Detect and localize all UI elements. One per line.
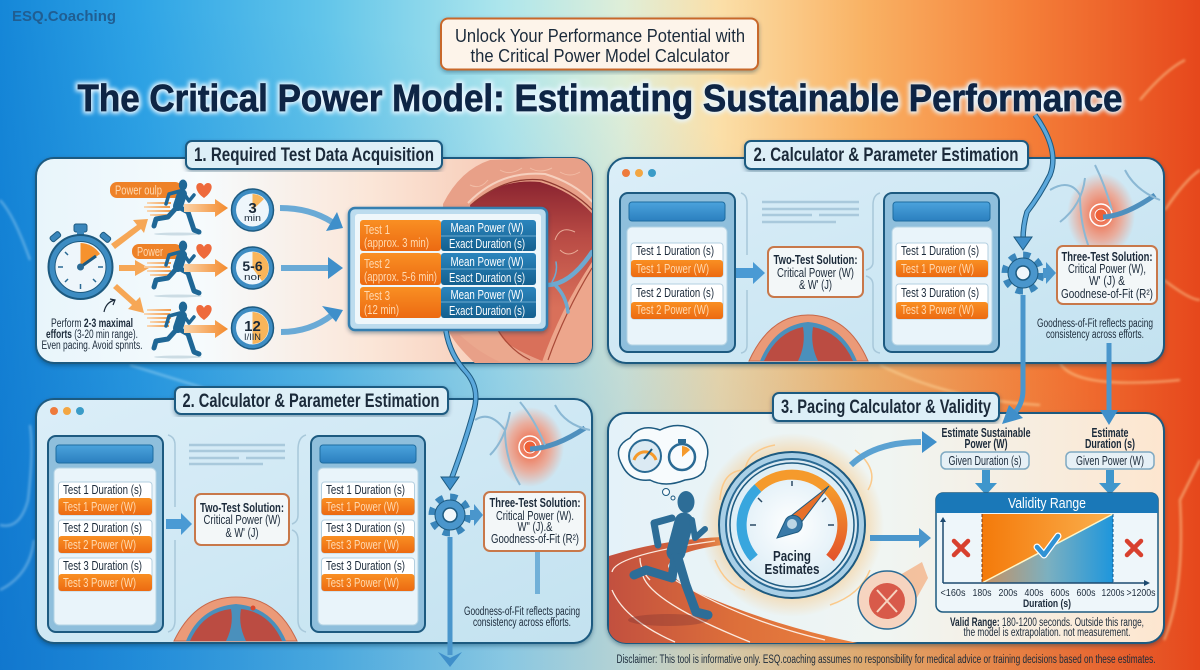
given power box [1066, 452, 1154, 469]
three-test solution box: Critical Power (W). [496, 509, 574, 523]
note text: Perform 2-3 maximal [51, 318, 133, 330]
invalid mark right [1127, 541, 1141, 555]
organ illustration [174, 597, 297, 641]
left input card [620, 193, 735, 352]
test 1 row: Test 1 [364, 223, 390, 237]
row: test 1 [58, 482, 152, 515]
note text: efforts (3-20 min range). [46, 329, 138, 341]
power output pill: Power oulp [115, 184, 162, 198]
estimate duration label [1085, 426, 1135, 451]
row: test 1: Test 1 Duration (s) [63, 483, 142, 497]
goodness-of-fit note: consistency across efforts. [1046, 329, 1144, 341]
axis labels: 600s [1050, 587, 1070, 599]
test 1 row: Mean Power (W) [450, 220, 524, 235]
heading: section 3 [773, 393, 999, 421]
row: test 3: Test 3 Duration (s) [63, 559, 142, 573]
estimate power label [942, 426, 1031, 451]
valid range note: the model is extrapolation. not measurement. [964, 627, 1130, 639]
subtitle box [441, 18, 758, 70]
heading: section 2 upper [745, 141, 1028, 169]
hearts [196, 183, 212, 320]
two-test solution box: Two-Test Solution: [774, 253, 858, 267]
two-test solution box: Critical Power (W) [777, 266, 854, 280]
axis labels: 400s [1024, 587, 1044, 599]
row: test 3 again [322, 558, 414, 591]
heading: section 1: 1. Required Test Data Acquisition [194, 145, 434, 166]
estimate power label: Estimate Sustainable [942, 426, 1031, 440]
big gauge: Pacing [773, 549, 811, 565]
clock: 12 min [232, 307, 274, 349]
icon: gear [1006, 256, 1040, 290]
orange arrows to clocks [184, 199, 228, 338]
row: test 3: Test 3 Duration (s) [901, 286, 979, 300]
clock: 3 min [232, 189, 274, 231]
thought bubble [618, 425, 708, 500]
row: test 2 [58, 520, 152, 553]
flow arrow: three-test to estimate duration [1100, 343, 1118, 425]
two-test solution box: & W' (J) [226, 526, 258, 540]
row: test 1 [896, 243, 988, 277]
axis labels: <160s [940, 587, 966, 599]
row: test 2 [631, 284, 723, 319]
runner shadows [154, 232, 202, 358]
validity range chart [936, 493, 1158, 612]
test 2 row: (approx. 5-6 min) [364, 270, 437, 284]
small arrow to stopwatch [104, 299, 115, 312]
test 2 row: Esact Duration (s) [449, 270, 525, 285]
test 2 row [360, 253, 536, 285]
arrows down to validity [975, 470, 1121, 495]
clock: 5-6 min: nor [244, 272, 261, 282]
flow arrow: title to upper gear [1014, 115, 1053, 250]
curved arrow to estimate [851, 431, 937, 465]
row: test 1: Test 1 Power (W) [326, 500, 399, 514]
three-test solution box: Three-Test Solution: [490, 496, 580, 510]
three-test solution box: W" (J).& [518, 520, 553, 534]
three-test solution box [484, 492, 585, 551]
three-test solution box: W' (J) & [1089, 274, 1126, 288]
estimate duration label: Estimate [1092, 426, 1129, 440]
estimate power label: Power (W) [964, 437, 1008, 451]
goodness-of-fit note: Goodness-of-Fit reflects pacing [1037, 318, 1153, 330]
row: test 2: Test 2 Power (W) [636, 303, 709, 317]
connector line [535, 552, 540, 594]
axis labels: >1200s [1126, 587, 1156, 599]
window dots [50, 407, 84, 415]
two-test solution box [195, 494, 289, 545]
validity range chart: Validity Range [1008, 496, 1086, 512]
heading: section 3: 3. Pacing Calculator & Validity [781, 397, 991, 418]
clock: 12 min: I/IIN [244, 332, 261, 342]
left input card [48, 436, 163, 632]
two-test solution box: & W' (J) [799, 278, 832, 292]
row: test 1: Test 1 Power (W) [63, 500, 136, 514]
heading: section 1 [186, 141, 442, 169]
icon: gear [433, 498, 467, 532]
gauge glow [700, 433, 884, 617]
test 3 row: (12 min) [364, 303, 399, 317]
valid range note [950, 617, 1144, 639]
right input card [884, 193, 999, 352]
arrow to three-test solution [1043, 262, 1056, 284]
row: test 3 [896, 284, 988, 319]
speed lines [144, 202, 171, 327]
row: test 2: Test 2 Duration (s) [63, 521, 142, 535]
subtitle box: Unlock Your Performance Potential with [455, 26, 745, 46]
goodness-of-fit note: consistency across efforts. [473, 617, 571, 629]
row: test 3 [322, 520, 414, 553]
row: test 1: Test 1 Duration (s) [901, 244, 979, 258]
title: The Critical Power Model: Estimating Sustainable Performance [78, 78, 1122, 120]
test 3 row: Mean Power (W) [450, 287, 524, 302]
three-test solution box: Three-Test Solution: [1062, 250, 1152, 264]
clock: 3 min: min [244, 213, 261, 224]
row: test 1 [322, 482, 414, 515]
clock: 5-6 min [232, 247, 274, 289]
test 2 row: Mean Power (W) [450, 254, 524, 269]
row: test 3 again: Test 3 Power (W) [326, 576, 399, 590]
validity range chart: Duration (s) [1023, 598, 1071, 610]
flow arrow: table to lower gear [441, 331, 476, 490]
icon: stopwatch [48, 224, 112, 299]
panel: required test data [36, 141, 600, 366]
test 2 row: Test 2 [364, 257, 390, 271]
axis labels: 180s [972, 587, 992, 599]
row: test 1 [631, 243, 723, 277]
right input card [311, 436, 425, 632]
panel: calculator lower left [36, 387, 592, 643]
three-test solution box: Goodness-of-Fit (R²) [491, 532, 579, 546]
big gauge [719, 452, 865, 598]
axis labels [940, 587, 1156, 599]
test 1 row: Exact Duration (s) [449, 236, 525, 251]
axis labels: 600s [1076, 587, 1096, 599]
row: test 2: Test 2 Power (W) [63, 538, 136, 552]
clock: 12 min: 12 [244, 318, 261, 335]
brackets [741, 193, 880, 353]
runner 1 [154, 180, 199, 232]
given power box: Given Power (W) [1076, 454, 1144, 468]
organ top right [475, 402, 590, 487]
arrow to two-test solution [736, 262, 765, 284]
big gauge: Estimates [764, 562, 820, 578]
two-test solution box: Two-Test Solution: [200, 501, 284, 515]
running track [609, 537, 862, 644]
axis labels: 200s [998, 587, 1018, 599]
window dots [622, 169, 656, 177]
title: The Critical Power Model: Estimating Sustainable Performance [78, 78, 1122, 120]
runner figure [634, 491, 708, 615]
panel: pacing calculator [608, 393, 1164, 644]
note text: Even pacing. Avoid spnnts. [42, 340, 142, 352]
three-test solution box: Goodnese-of-Fit (R²) [1061, 287, 1153, 301]
goodness-of-fit note: Goodness-of-Fit reflects pacing [464, 606, 580, 618]
arrow to two-test solution [166, 513, 192, 535]
flow arrow: upper gear to estimate power [1002, 295, 1026, 424]
row: test 3 again: Test 3 Duration (s) [326, 559, 405, 573]
heading: section 2 upper: 2. Calculator & Parameter Estimation [754, 145, 1018, 166]
test 1 row: (approx. 3 min) [364, 236, 429, 250]
goodness-of-fit note [1037, 318, 1153, 341]
placeholder lines [189, 445, 285, 464]
heading: section 2 lower: 2. Calculator & Parameter Estimation [182, 391, 440, 412]
clock: 3 min: 3 [248, 200, 257, 217]
brackets [168, 435, 306, 632]
three-test solution box [1057, 246, 1157, 304]
note text [42, 318, 142, 352]
small organ icon [858, 562, 928, 629]
runner 2 [154, 240, 199, 293]
two-test solution box: Critical Power (W) [204, 513, 280, 527]
table: test data [349, 208, 547, 330]
organ illustration [443, 156, 600, 366]
given duration box [941, 452, 1029, 469]
test 3 row [360, 287, 536, 318]
row: test 3: Test 3 Power (W) [901, 303, 974, 317]
estimate duration label: Duration (s) [1085, 437, 1135, 451]
row: test 3: Test 3 Power (W) [63, 576, 136, 590]
organ top right [1050, 164, 1160, 245]
logo: ESQ.Coaching [12, 8, 116, 25]
power pill [132, 244, 182, 259]
row: test 3: Test 3 Power (W) [326, 538, 399, 552]
blue arrows to table [280, 208, 332, 332]
three-test solution box: Critical Power (W), [1068, 262, 1146, 276]
placeholder lines [762, 202, 859, 222]
row: test 3 [58, 558, 152, 591]
row: test 2: Test 2 Duration (s) [636, 286, 714, 300]
goodness-of-fit note [464, 606, 580, 629]
test 3 row: Exact Duration (s) [449, 303, 525, 318]
arrow to three-test solution [470, 504, 483, 526]
runner 3 [154, 302, 199, 354]
arrows from stopwatch [111, 219, 149, 313]
row: test 1: Test 1 Duration (s) [636, 244, 714, 258]
given duration box: Given Duration (s) [948, 454, 1022, 468]
power pill: Power [137, 245, 163, 259]
panel: calculator upper right [608, 141, 1164, 363]
test 1 row [360, 220, 536, 251]
arrow to validity range [870, 528, 931, 548]
row: test 1: Test 1 Power (W) [901, 262, 974, 276]
valid check mark [1037, 536, 1058, 555]
organ illustration [749, 315, 868, 361]
row: test 3: Test 3 Duration (s) [326, 521, 405, 535]
axis labels: 1200s [1102, 587, 1124, 599]
heading: section 2 lower [175, 387, 448, 414]
row: test 1: Test 1 Power (W) [636, 262, 709, 276]
clock: 5-6 min: 5-6 [242, 258, 263, 274]
subtitle box: the Critical Power Model Calculator [470, 46, 730, 66]
invalid mark left [954, 541, 968, 555]
valid range note: Valid Range: 180-1200 seconds. Outside this range, [950, 617, 1144, 629]
test 3 row: Test 3 [364, 289, 390, 303]
row: test 1: Test 1 Duration (s) [326, 483, 405, 497]
flow arrow: lower gear to bottom [438, 537, 462, 667]
two-test solution box [768, 247, 863, 297]
